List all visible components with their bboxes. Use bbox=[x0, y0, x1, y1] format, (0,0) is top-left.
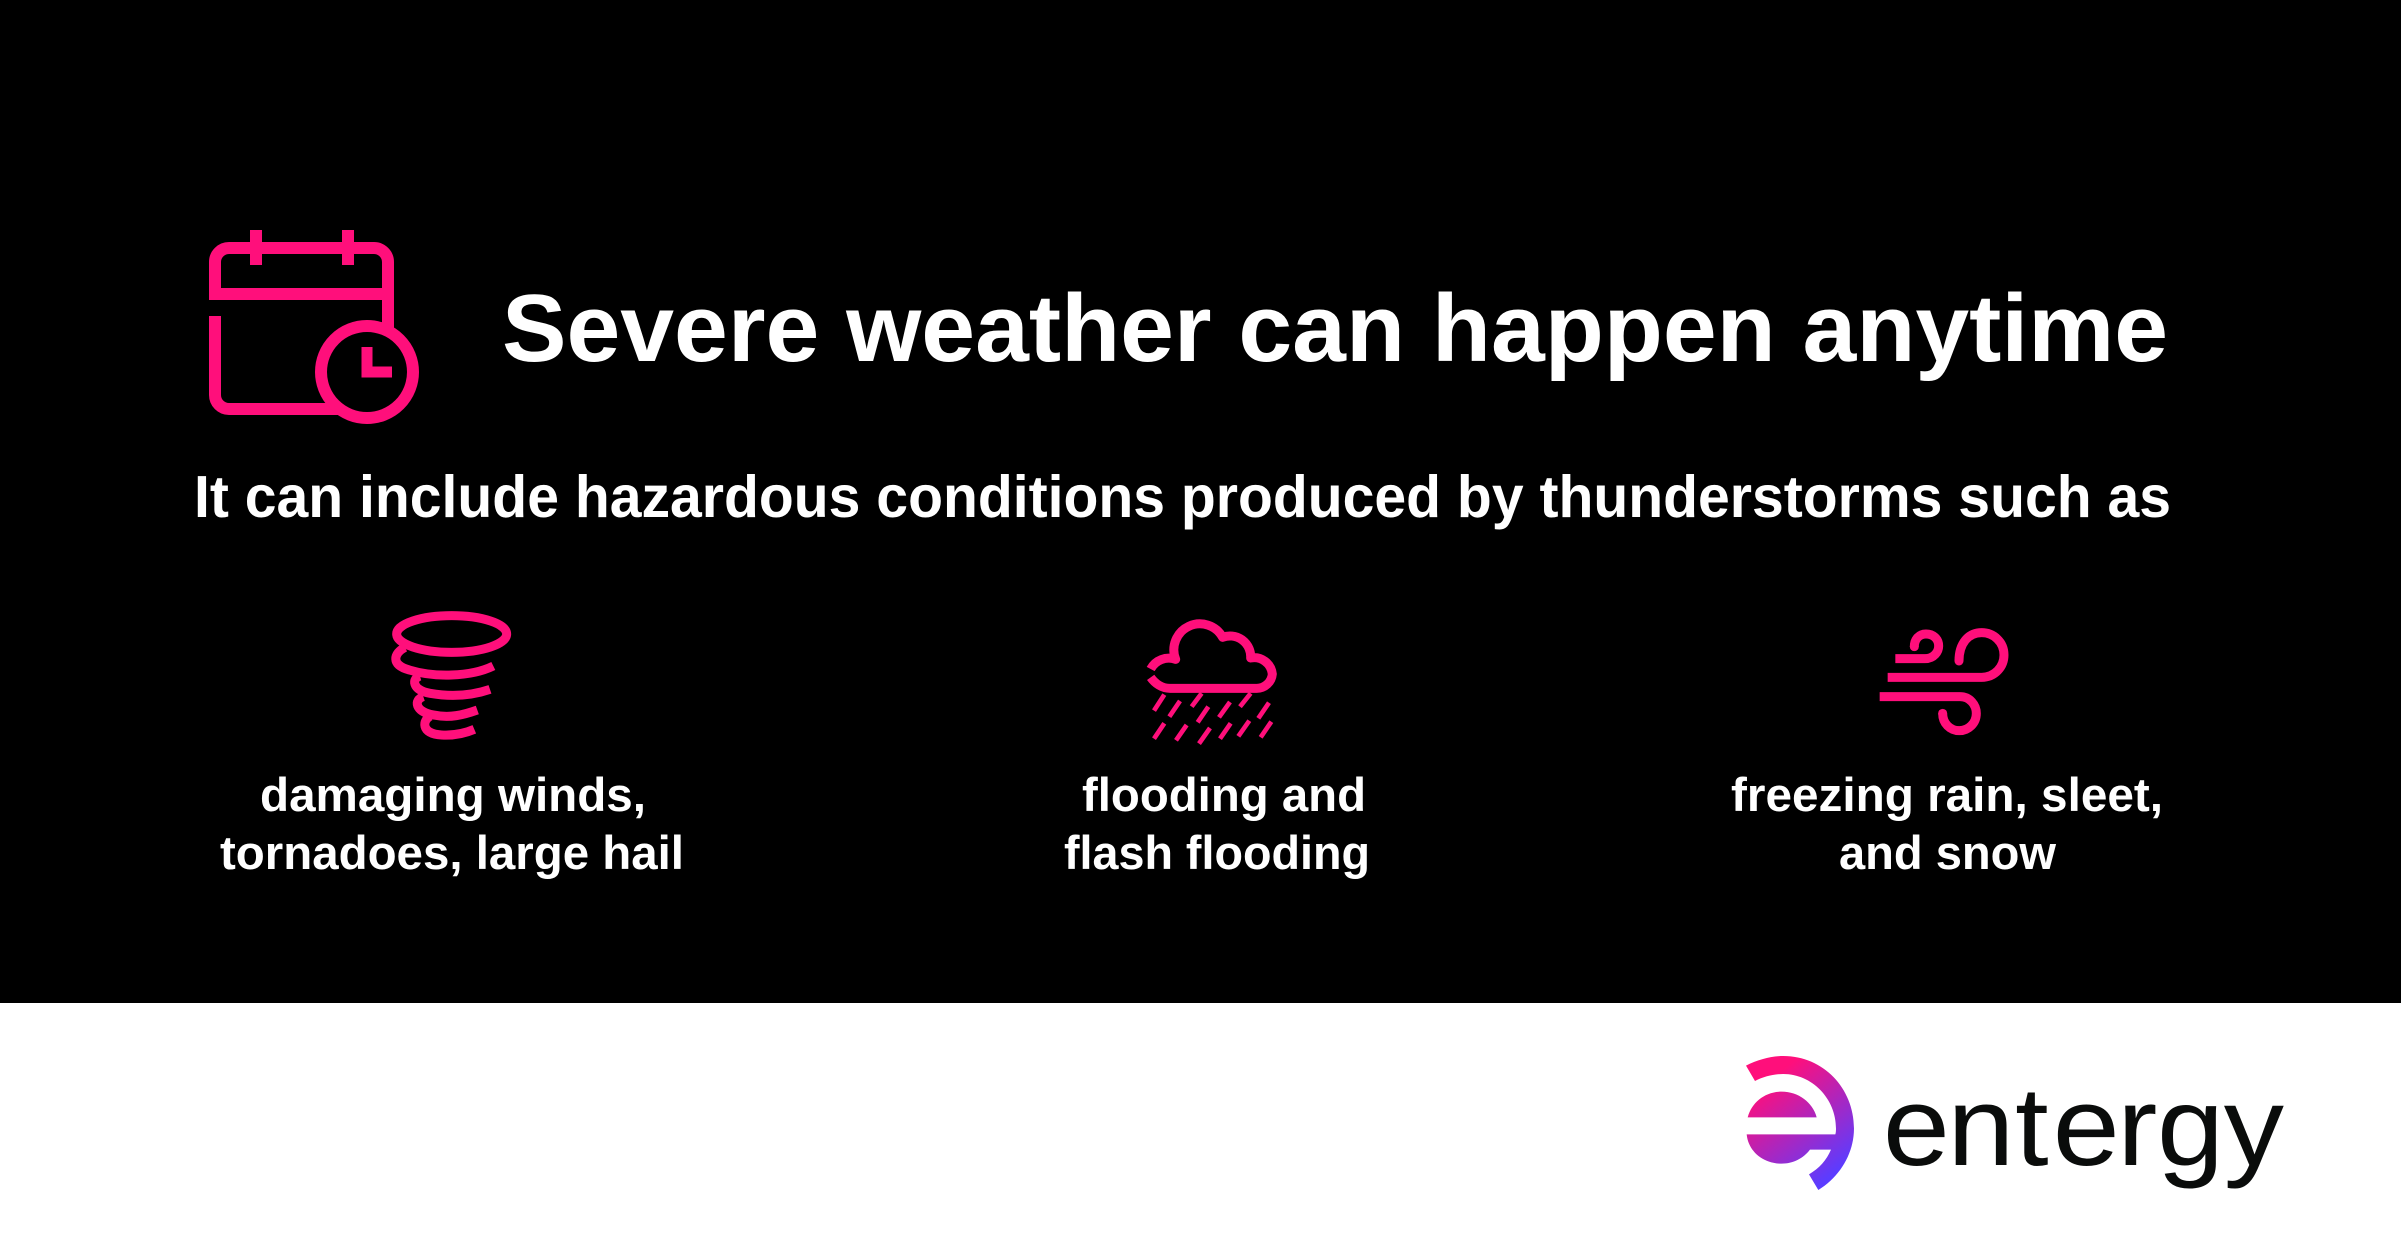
label: flooding bbox=[1064, 768, 1370, 879]
subtitle: It can include hazardous conditions produced by thunderstorms such as bbox=[194, 464, 2171, 530]
label: flooding: flash flooding bbox=[1064, 826, 1370, 879]
panel: black background bbox=[0, 0, 2401, 1003]
label: freezing rain: and snow bbox=[1839, 826, 2056, 879]
label: freezing rain: freezing rain, sleet, bbox=[1731, 768, 2163, 821]
icon: calendar with clock bbox=[209, 230, 413, 418]
logo wordmark: entergy bbox=[1883, 1064, 2284, 1189]
label: damaging winds: tornadoes, large hail bbox=[220, 826, 684, 879]
title: Severe weather can happen anytime bbox=[502, 275, 2168, 382]
icon: entergy logo mark bbox=[1746, 1056, 1854, 1190]
icon: rain cloud bbox=[1151, 624, 1272, 744]
icon: wind bbox=[1880, 633, 2004, 731]
label: damaging winds bbox=[220, 768, 684, 879]
label: freezing rain bbox=[1731, 768, 2163, 879]
label: flooding: flooding and bbox=[1082, 768, 1366, 821]
icon: tornado bbox=[396, 616, 507, 735]
label: damaging winds: damaging winds, bbox=[260, 768, 646, 821]
